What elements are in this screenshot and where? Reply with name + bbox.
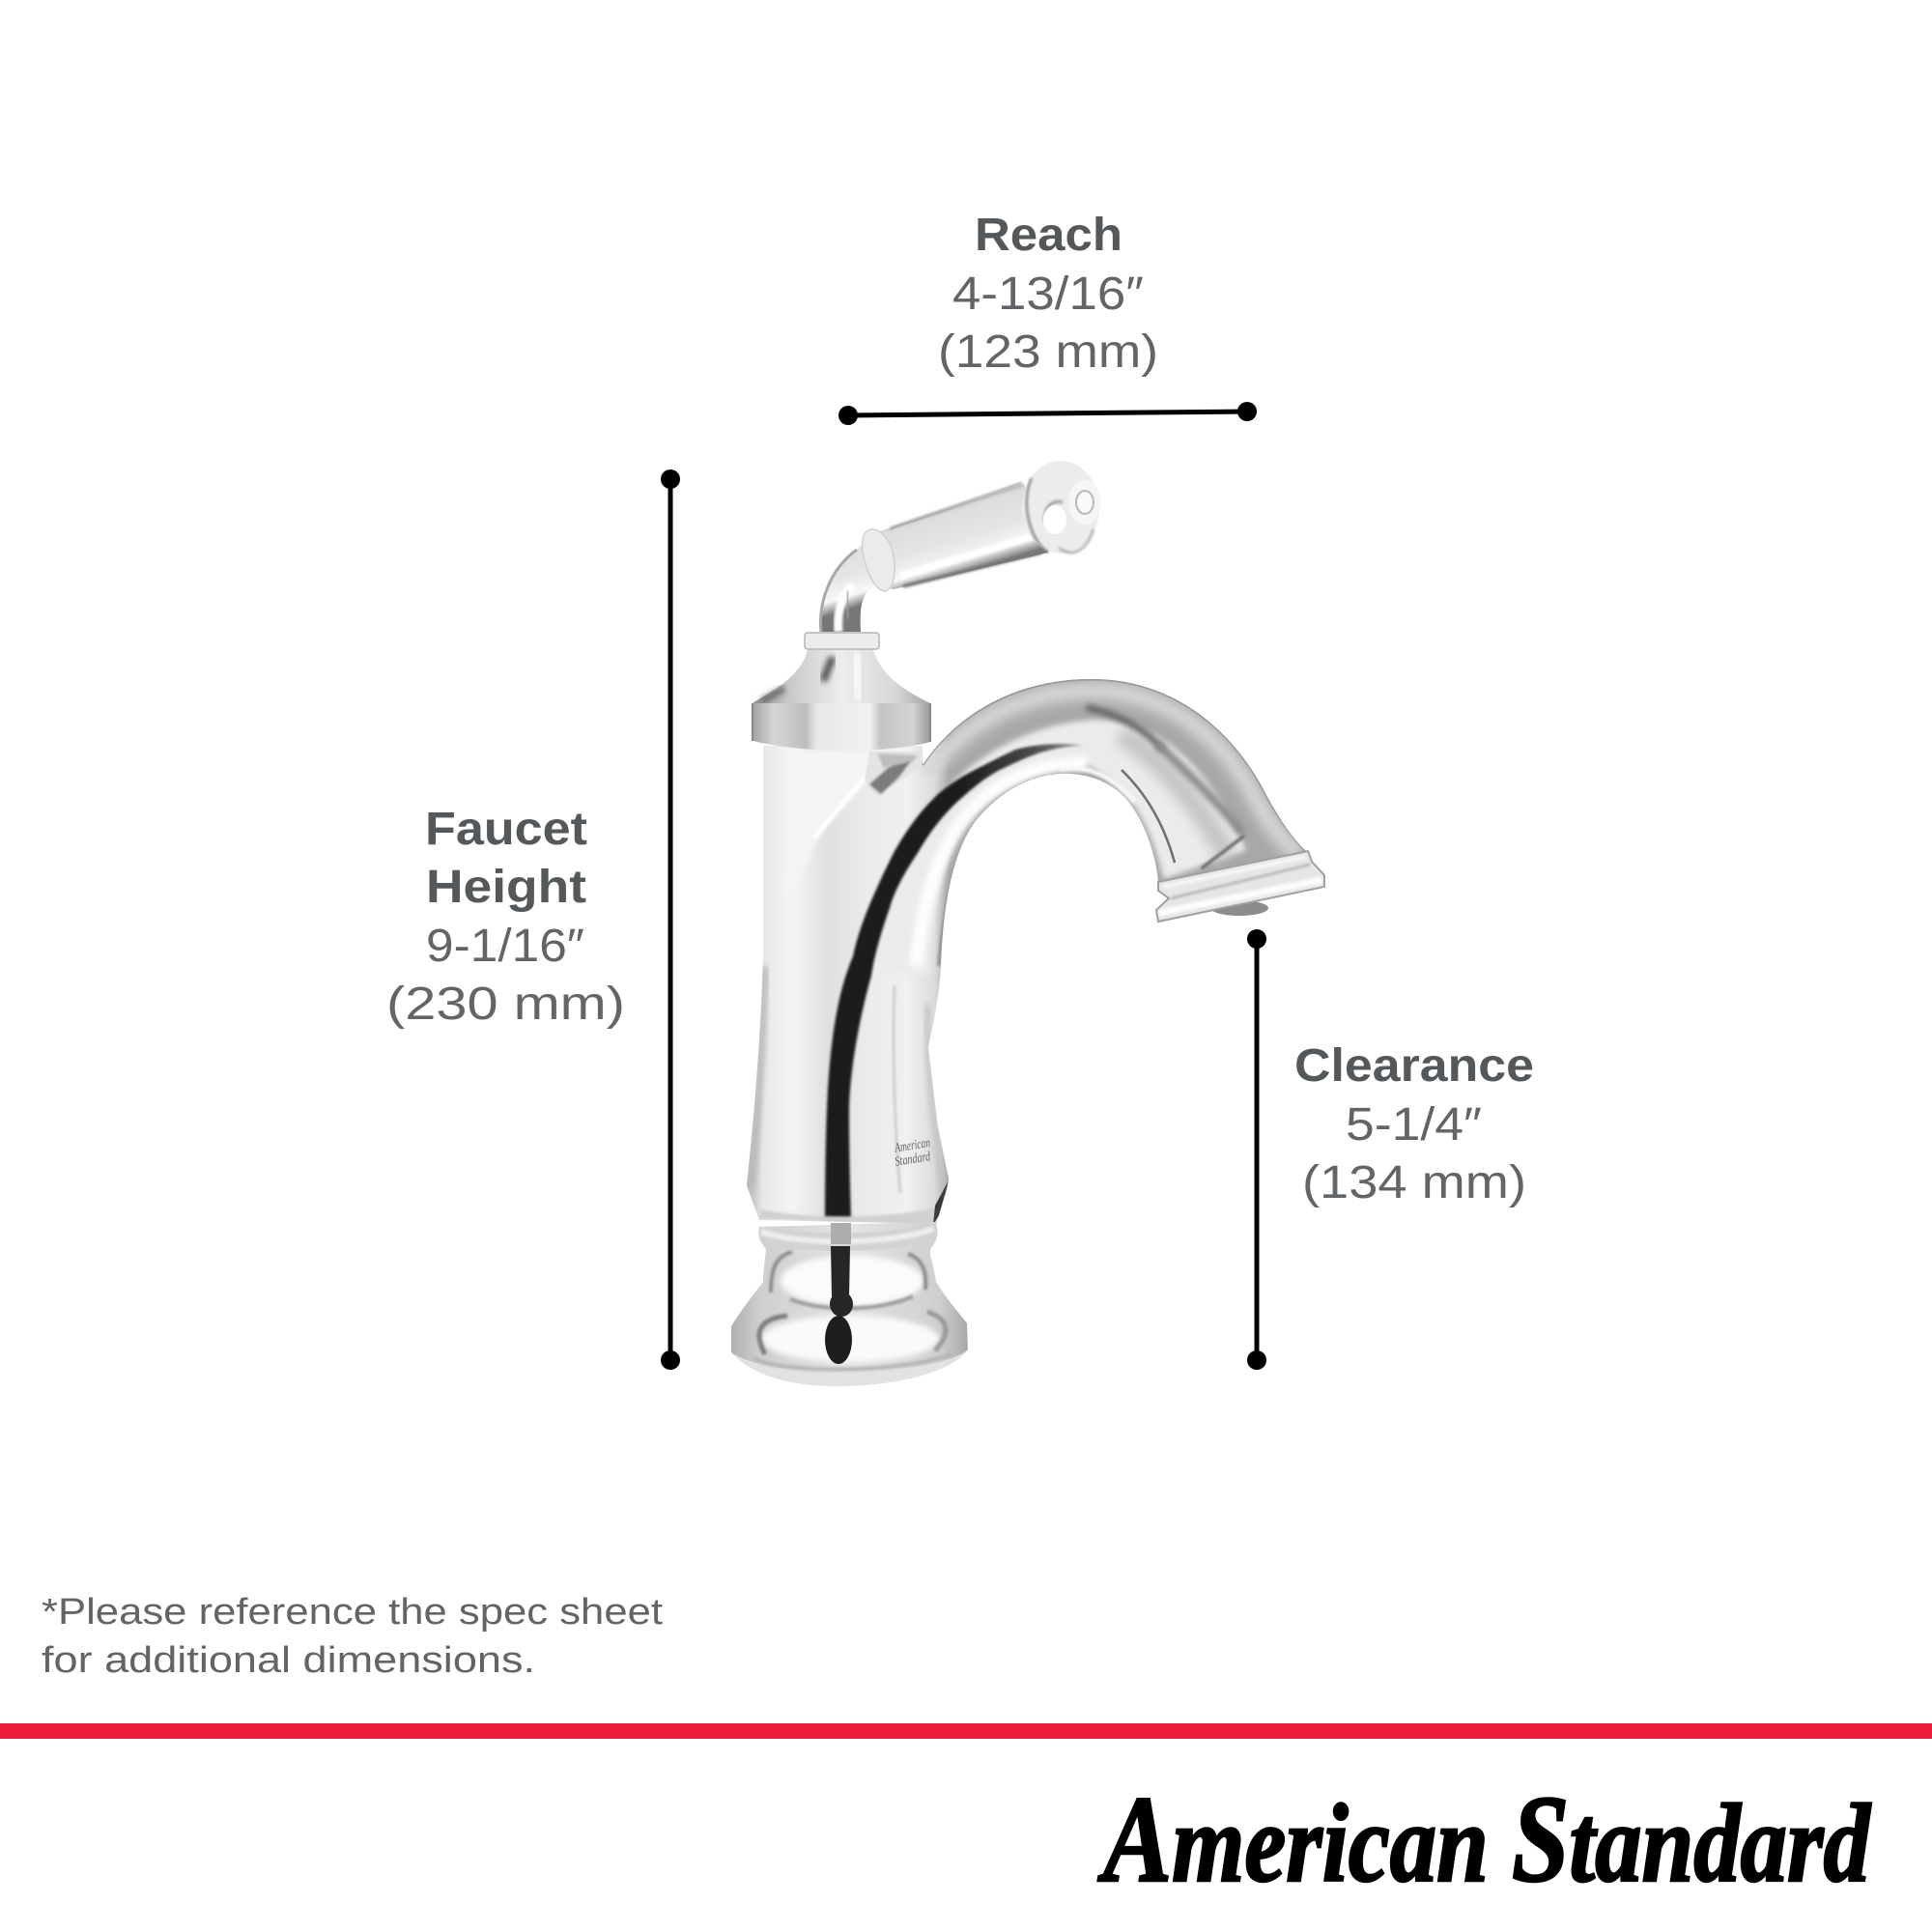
faucet aerator	[1156, 851, 1324, 922]
faucet base	[731, 1221, 968, 1386]
faucet handle lever	[821, 461, 1101, 632]
brand logo: American Standard	[1097, 1771, 1872, 1908]
dimension line: faucet height	[661, 469, 680, 1370]
footnote	[42, 1592, 664, 1681]
label: reach: Reach	[975, 210, 1122, 261]
label: faucet height: Height	[426, 862, 586, 913]
label: clearance	[1294, 1040, 1534, 1208]
label: faucet height: (230 mm)	[386, 979, 625, 1030]
label: clearance: (134 mm)	[1302, 1157, 1526, 1208]
label: faucet height: 9-1/16″	[426, 921, 584, 972]
faucet body and spout	[747, 679, 1308, 1225]
body right accents	[894, 985, 900, 1193]
label: reach: (123 mm)	[938, 327, 1158, 378]
footnote: for additional dimensions.	[42, 1640, 535, 1681]
dimension line: clearance	[1247, 929, 1266, 1370]
faucet illustration	[731, 461, 1324, 1386]
label: faucet height: Faucet	[425, 804, 587, 855]
spout shading	[787, 679, 1308, 976]
label: clearance: Clearance	[1294, 1040, 1534, 1092]
faucet engraved logo: American	[894, 1136, 931, 1156]
dark reflection streak	[825, 744, 1084, 1219]
label: reach	[938, 210, 1158, 378]
faucet engraved logo	[892, 1136, 933, 1170]
label: clearance: 5-1/4″	[1346, 1099, 1482, 1151]
faucet engraved logo: Standard	[894, 1150, 932, 1170]
red divider bar	[0, 1723, 1932, 1739]
faucet cap	[753, 633, 930, 751]
label: faucet height	[386, 804, 625, 1030]
dimension line: reach	[838, 402, 1257, 425]
footnote: *Please reference the spec sheet	[42, 1592, 664, 1633]
label: reach: 4-13/16″	[952, 269, 1144, 320]
